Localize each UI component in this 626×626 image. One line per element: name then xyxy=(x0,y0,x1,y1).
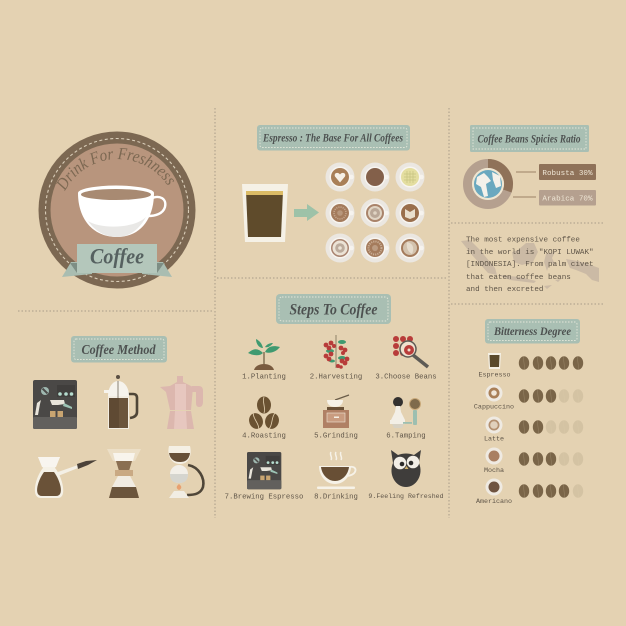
row: espresso xyxy=(478,353,583,380)
ribbon xyxy=(62,244,172,277)
step labels xyxy=(225,374,444,502)
legend: arabica: Arabica 70% xyxy=(542,196,593,204)
heading banner xyxy=(276,294,391,324)
row: americano: Americano xyxy=(476,498,512,506)
row: latte xyxy=(484,416,583,444)
step labels: 1.Planting xyxy=(242,374,286,382)
step labels: 6.Tamping xyxy=(386,432,426,440)
row: espresso: Espresso xyxy=(478,372,511,380)
badge: drink for freshness coffee xyxy=(38,132,196,288)
icon: choose beans xyxy=(393,336,428,367)
heading banner xyxy=(71,336,167,362)
legend: robusta: Robusta 30% xyxy=(542,170,593,178)
icon: turkish pot xyxy=(35,457,97,498)
row: cappuccino: Cappuccino xyxy=(474,404,514,412)
heading banner: Steps To Coffee xyxy=(290,302,378,318)
step labels: 3.Choose Beans xyxy=(375,374,437,382)
icon: siphon xyxy=(168,446,203,498)
icon: owl xyxy=(391,450,421,487)
row: mocha: Mocha xyxy=(484,467,504,475)
icon: tamping xyxy=(390,397,420,428)
heading banner: Espresso : The Base For All Coffees xyxy=(262,130,403,144)
text block: [INDONESIA]. From palm civet xyxy=(466,261,594,269)
row: mocha xyxy=(484,448,583,475)
badge heading: Drink For Freshness xyxy=(56,148,174,191)
heading banner: Coffee Beans Spicies Ratio xyxy=(478,134,581,146)
icon: brewing machine xyxy=(247,452,281,489)
cups grid xyxy=(326,162,424,262)
row: americano xyxy=(476,478,583,506)
icon: drinking cup xyxy=(317,452,356,489)
icon: harvesting xyxy=(324,335,349,369)
step labels: 8.Drinking xyxy=(314,494,358,502)
step labels: 7.Brewing Espresso xyxy=(225,494,303,502)
text block: and then excreted xyxy=(466,286,543,294)
heading banner: Bitterness Degree xyxy=(493,324,572,338)
donut chart xyxy=(468,163,509,204)
icon: grinder xyxy=(323,395,349,428)
heading banner xyxy=(257,125,410,150)
step labels: 5.Grinding xyxy=(314,432,358,440)
icon: french press xyxy=(104,375,137,429)
panel: beans species ratio xyxy=(468,125,596,206)
arrow xyxy=(294,204,319,221)
text block: The most expensive coffee xyxy=(466,236,580,244)
panel: espresso base xyxy=(242,125,424,262)
panel: coffee method xyxy=(33,336,203,498)
icon: espresso machine xyxy=(33,380,77,429)
text block: that eaten coffee beans xyxy=(466,274,571,282)
icon: coffee cup xyxy=(78,186,165,237)
ribbon label: Coffee xyxy=(90,244,144,268)
step labels: 2.Harvesting xyxy=(310,374,362,382)
icon: chemex xyxy=(107,449,141,498)
icon: planting xyxy=(248,339,280,370)
panel: bitterness degree xyxy=(474,319,583,506)
map: indonesia xyxy=(461,240,599,289)
row: latte: Latte xyxy=(484,436,504,444)
icon: roasting beans xyxy=(247,396,281,431)
text block xyxy=(466,236,594,294)
icon: espresso glass xyxy=(242,184,288,242)
step labels: 9.Feeling Refreshed xyxy=(368,493,444,500)
icon: moka pot xyxy=(160,376,203,429)
panel: steps to coffee xyxy=(225,294,444,502)
text block: in the world is "KOPI LUWAK" xyxy=(466,249,594,257)
panel: kopi luwak xyxy=(461,236,599,294)
row: cappuccino xyxy=(474,384,583,412)
step labels: 4.Roasting xyxy=(242,432,286,440)
heading banner: Coffee Method xyxy=(82,342,156,357)
heading banner xyxy=(485,319,580,344)
